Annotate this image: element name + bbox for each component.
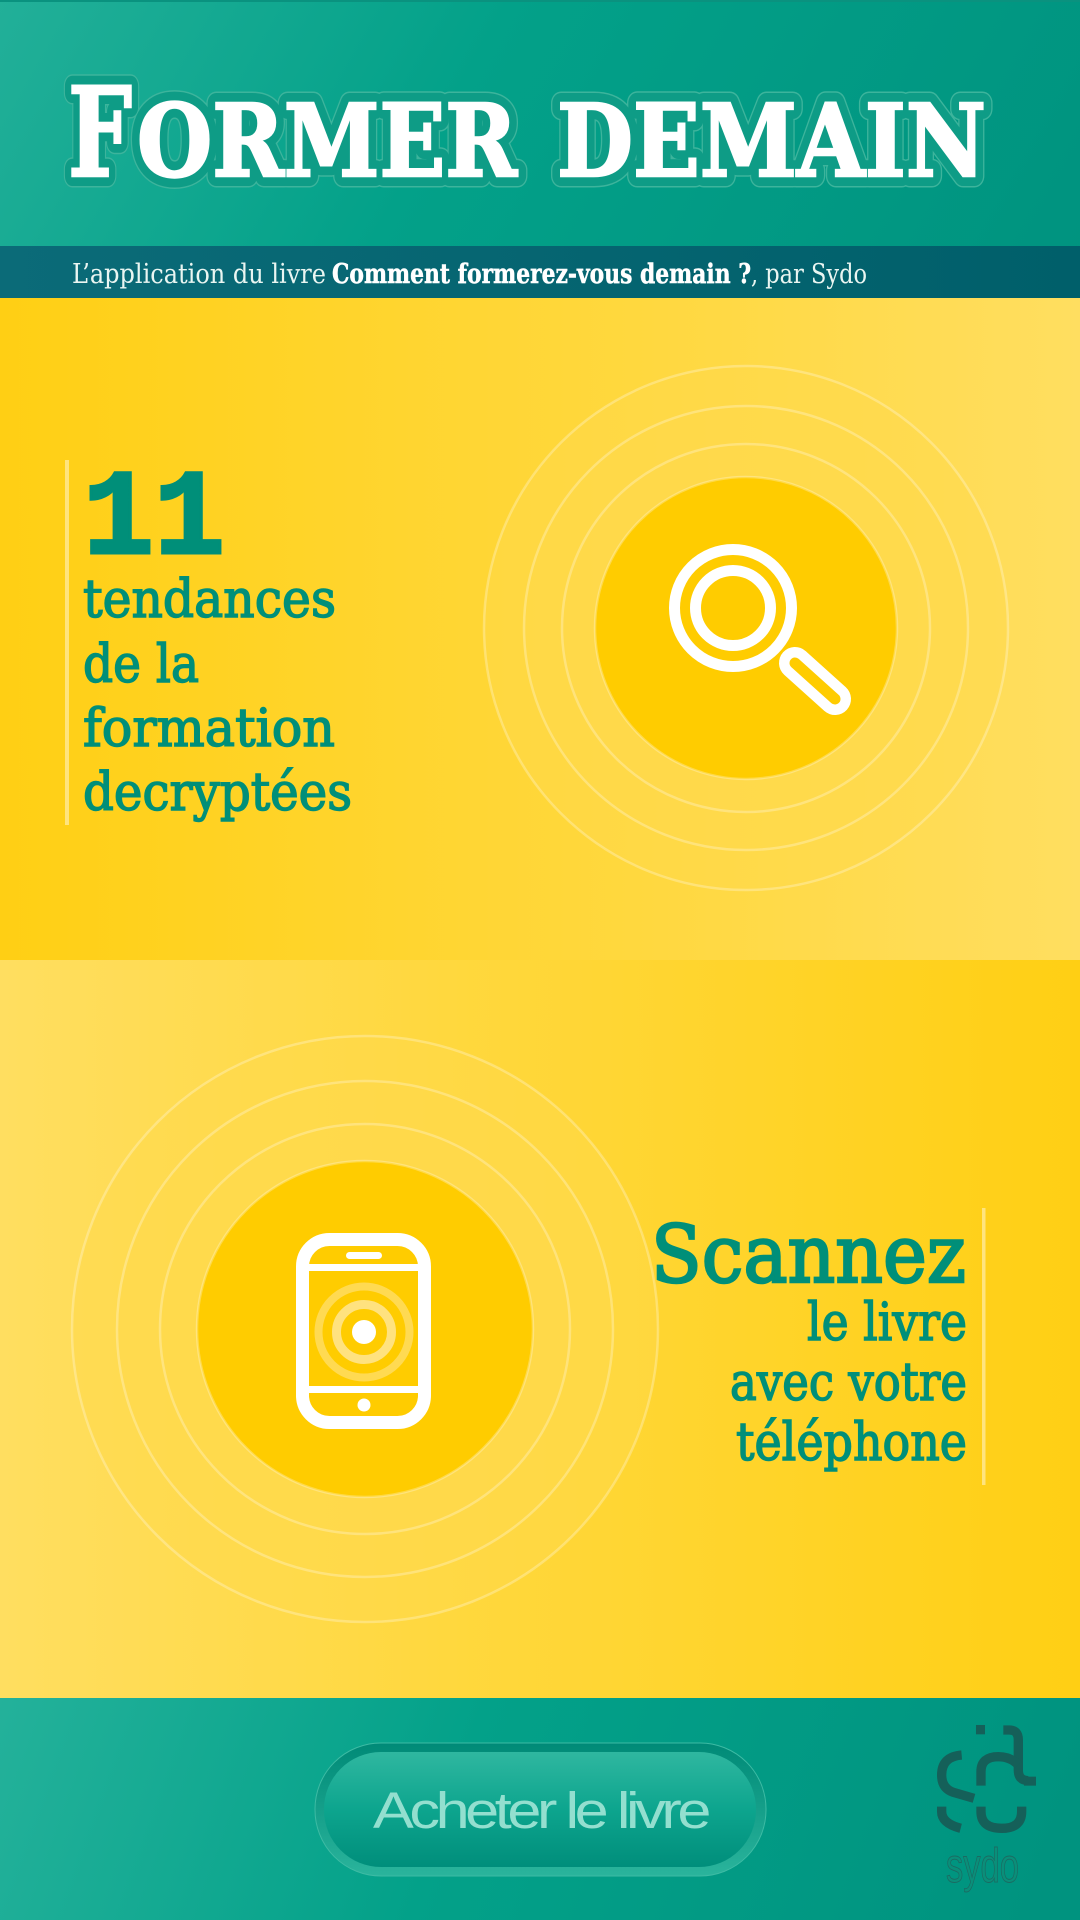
title: Former demain: ORMER <box>137 82 518 200</box>
text: Scannez le livre avec votre téléphone: téléphone <box>736 1413 967 1473</box>
text: 11 tendances de la formation decryptées: tendances <box>83 570 336 630</box>
logo: sydo: sydo <box>946 1840 1019 1893</box>
panel: scannez <box>0 960 1080 1698</box>
title: Former demain: ORMER <box>137 82 518 200</box>
button: Acheter le livre <box>315 1743 766 1876</box>
text: 11 tendances de la formation decryptées: formation <box>83 699 335 759</box>
title: Former demain: F <box>68 61 132 206</box>
subtitle band: Comment formerez-vous demain ? <box>332 259 751 290</box>
icon: magnifying glass <box>674 550 835 699</box>
title: Former demain: F <box>68 61 132 206</box>
logo: sydo <box>942 1725 1036 1893</box>
text: Scannez le livre avec votre téléphone <box>651 1208 967 1473</box>
text: 11 tendances de la formation decryptées: 11 <box>83 451 225 590</box>
icon: smartphone <box>302 1240 424 1422</box>
divider bar left <box>65 460 69 825</box>
text: 11 tendances de la formation decryptées <box>83 451 352 823</box>
panel: 11 tendances <box>0 298 1080 960</box>
concentric circles <box>72 1036 658 1622</box>
title: Former demain: DEMAIN <box>557 82 986 200</box>
title: Former demain: DEMAIN <box>557 82 986 200</box>
concentric circles <box>484 366 1008 890</box>
text: Scannez le livre avec votre téléphone: Scannez <box>651 1208 966 1301</box>
panel: footer <box>0 1698 1080 1920</box>
button: Acheter le livre: Acheter le livre <box>373 1782 711 1839</box>
subtitle band <box>0 246 1080 298</box>
subtitle band: , par Sydo <box>751 259 867 290</box>
text: 11 tendances de la formation decryptées: decryptées <box>83 763 352 823</box>
title: Former demain <box>68 61 986 206</box>
title: Former demain: ORMER <box>137 82 518 200</box>
title: Former demain: F <box>68 61 132 206</box>
panel: header <box>0 0 1080 246</box>
subtitle band: L’application du livre <box>72 259 326 290</box>
divider bar right <box>982 1208 986 1485</box>
title: Former demain: DEMAIN <box>557 82 986 200</box>
text: Scannez le livre avec votre téléphone: le livre <box>807 1293 967 1353</box>
text: Scannez le livre avec votre téléphone: avec votre <box>730 1353 967 1413</box>
text: 11 tendances de la formation decryptées: de la <box>83 635 199 695</box>
